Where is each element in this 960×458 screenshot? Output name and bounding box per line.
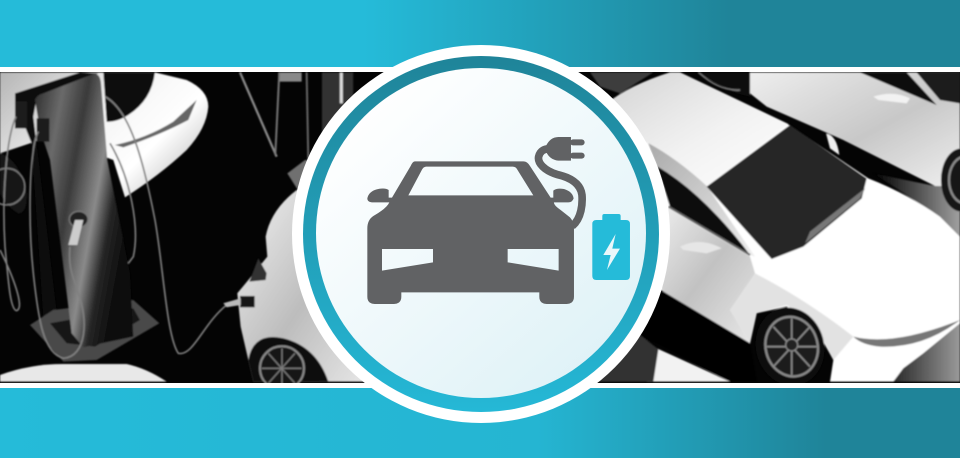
windscreen: [707, 125, 867, 259]
car rear with charge port: [223, 190, 367, 390]
charger holster: [69, 211, 88, 227]
white car front, top left: [0, 72, 208, 213]
icon: charging cable and plug: [538, 137, 585, 226]
post base: [30, 300, 159, 362]
headlight: [853, 320, 960, 347]
badge inner disc: [316, 68, 646, 398]
white car, bottom edge: [0, 364, 167, 382]
icon: electric car with plug and battery: [367, 137, 630, 304]
photo strip: cars charging: [0, 72, 960, 393]
front wheel: [756, 306, 826, 383]
main white car: [607, 72, 960, 382]
white strips framing the photo: [0, 67, 960, 388]
white car, bottom edge: [647, 348, 730, 382]
bottom teal band: [0, 388, 960, 458]
charging cables: [0, 97, 227, 358]
left photo: charging station and cars: [0, 72, 367, 390]
background post and poles: [240, 72, 353, 193]
central badge: [292, 45, 670, 423]
top teal band: [0, 0, 960, 67]
shadow under the car: [644, 291, 751, 382]
icon: battery with bolt: [592, 214, 630, 280]
charging post: [15, 72, 159, 362]
badge teal ring: [303, 56, 659, 412]
right photo: white cars from above: [590, 72, 960, 393]
dark glass at top left: [590, 72, 653, 93]
badge white outer disc: [292, 45, 670, 423]
icon: car front: [367, 161, 574, 304]
floor, bottom right: [893, 320, 960, 382]
rear car, top right: [697, 72, 960, 237]
